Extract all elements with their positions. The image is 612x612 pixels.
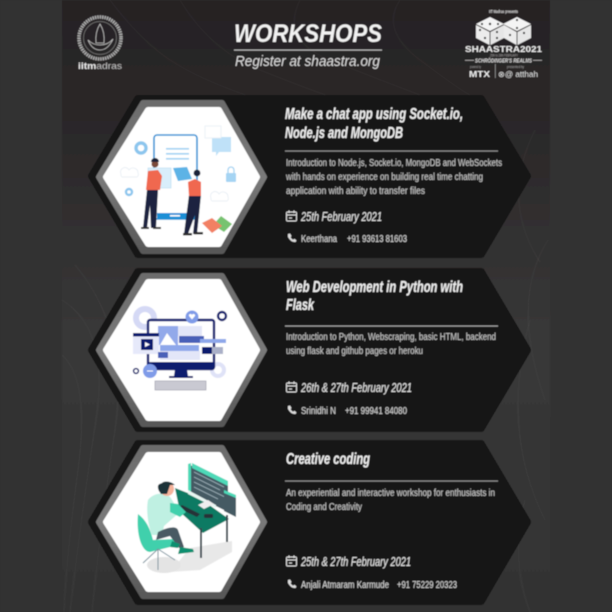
panel 3 calendar icon xyxy=(286,556,296,566)
panel 3 description xyxy=(286,487,495,513)
panel 1 description: application with ability to transfer files xyxy=(286,185,425,197)
panel: chat app workshop xyxy=(92,99,527,254)
panel 1 title: Make a chat app using Socket.io, xyxy=(285,106,463,123)
panel 3 hexagon frame xyxy=(99,448,264,596)
heading xyxy=(234,20,382,70)
panel: creative coding workshop xyxy=(92,444,527,601)
logo: Shaastra 2021 xyxy=(465,9,543,79)
panel 2 title: Web Development in Python with xyxy=(286,279,463,296)
panel 2 contact: Srinidhi N xyxy=(301,405,336,417)
panel 2 title: Flask xyxy=(286,297,315,314)
panel 2 hexagon image area xyxy=(106,282,257,418)
panel 2 date: 26th & 27th February 2021 xyxy=(300,381,412,395)
panel 2 description: Introduction to Python, Webscraping, basic HTML, backend xyxy=(286,331,496,343)
panel 1 contact: Keerthana xyxy=(301,233,337,245)
panel 2 calendar icon xyxy=(286,382,296,392)
panel 1 contact: +91 93613 81603 xyxy=(347,233,407,245)
logo: Shaastra 2021: IIT Madras presents xyxy=(489,9,518,14)
panel 2 contact: +91 99941 84080 xyxy=(345,405,407,417)
logo: IIT Madras xyxy=(78,17,123,71)
panel 3 description: Coding and Creativity xyxy=(286,501,363,513)
panel 2 description: using flask and github pages or heroku xyxy=(286,345,423,357)
logo: Shaastra 2021: ⊗@ atthah xyxy=(498,70,538,79)
panel 3 contact: +91 75229 20323 xyxy=(397,579,457,591)
panel 1 description: with hands on experience on building real time chatting xyxy=(285,171,483,183)
panel 1 date: 25th February 2021 xyxy=(300,210,382,224)
panel 2 background xyxy=(92,272,527,428)
logo: IIT Madras: iitm adras xyxy=(78,61,123,71)
logo: Shaastra 2021: presented by xyxy=(507,65,524,69)
illustration: people with phone app xyxy=(121,126,236,235)
panel 3 background xyxy=(92,444,527,601)
panel 1 calendar icon xyxy=(286,210,296,221)
panel 3 hexagon image area xyxy=(106,455,257,589)
panel 1 hexagon frame xyxy=(99,103,264,251)
panel 2 phone icon xyxy=(288,406,296,414)
logo: Shaastra 2021: SHAASTRA2021 xyxy=(465,45,543,54)
panel 2 description xyxy=(286,331,496,357)
illustration: person coding at desk xyxy=(138,463,236,573)
panel: web development workshop xyxy=(92,272,527,428)
panel 2 title xyxy=(286,279,463,314)
logo: Shaastra 2021: MTX xyxy=(469,69,490,79)
heading: Register at shaastra.org xyxy=(235,54,380,70)
panel 2 hexagon frame xyxy=(99,276,264,424)
panel 1 hexagon image area xyxy=(106,110,257,244)
panel 3 title: Creative coding xyxy=(286,451,370,468)
logo: Shaastra 2021: 25th to 28th FEBRUARY xyxy=(490,54,518,58)
panel 2 contact xyxy=(301,405,407,417)
illustration: web development monitor xyxy=(133,309,226,390)
panel 1 title xyxy=(285,106,463,142)
panel 1 description xyxy=(285,157,502,197)
panel 1 contact xyxy=(301,233,407,245)
panel 1 phone icon xyxy=(288,234,296,242)
heading: WORKSHOPS xyxy=(234,20,382,48)
panel 1 background xyxy=(92,99,527,254)
panel 1 description: Introduction to Node.js, Socket.io, MongoDB and WebSockets xyxy=(286,157,502,169)
panel 3 contact: Anjali Atmaram Karmude xyxy=(301,579,389,591)
logo: Shaastra 2021: powered by xyxy=(470,65,481,69)
logo: Shaastra 2021: SCHRÖDINGER'S REALMS xyxy=(475,58,532,64)
panel 3 date: 25th & 27th February 2021 xyxy=(300,555,411,569)
panel 1 title: Node.js and MongoDB xyxy=(285,125,403,142)
panel 3 phone icon xyxy=(288,580,296,588)
panel 3 description: An experiential and interactive workshop for enthusiasts in xyxy=(286,487,495,499)
